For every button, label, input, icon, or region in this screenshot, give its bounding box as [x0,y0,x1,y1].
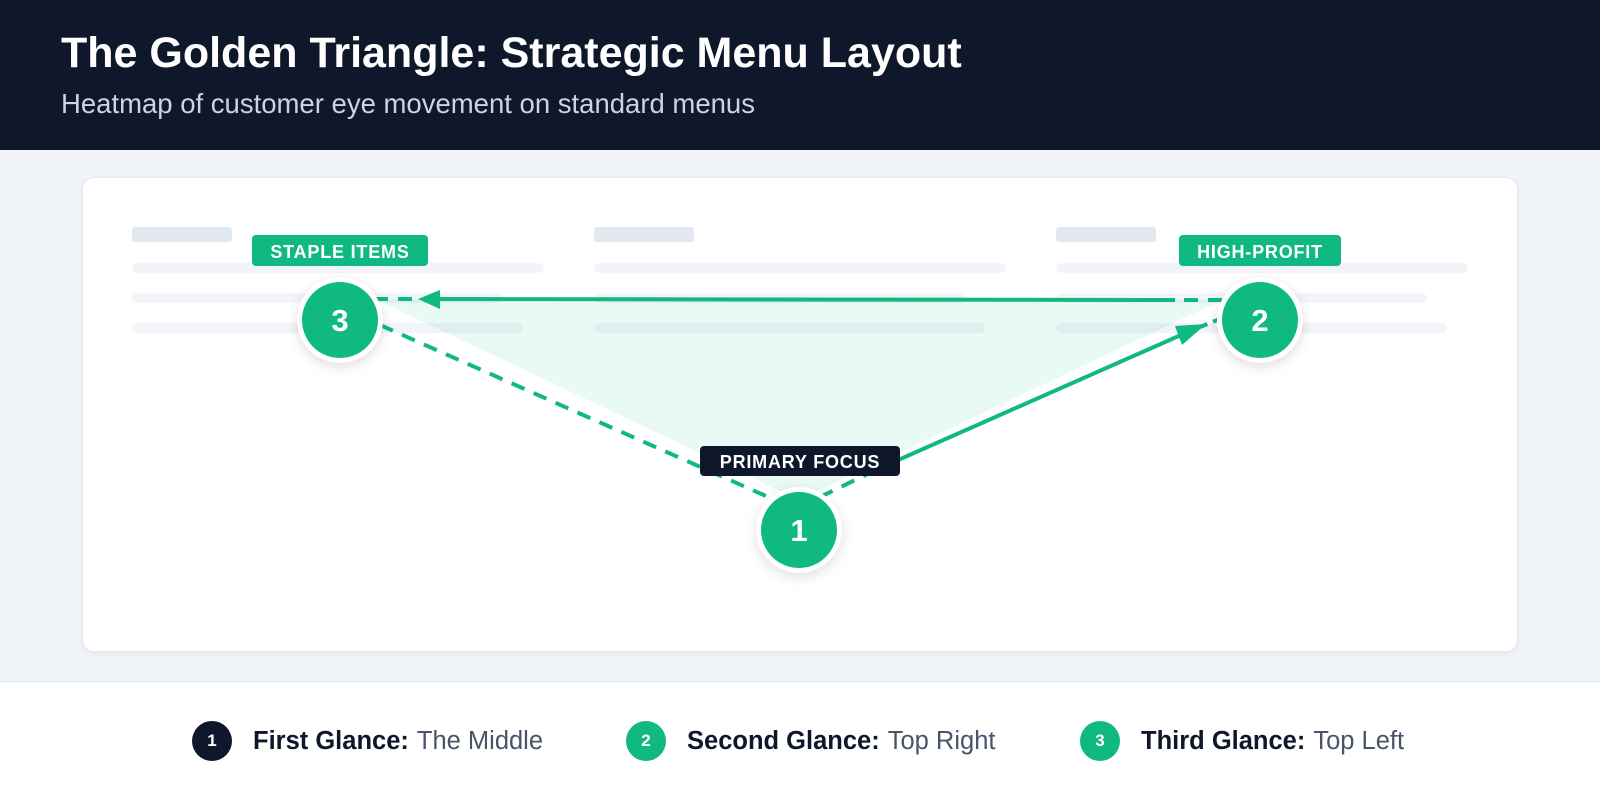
marker 1: 1 [790,513,808,548]
label: high-profit: HIGH-PROFIT [1197,242,1323,262]
legend item 2: 2 [641,731,651,750]
legend item 3 [1080,721,1404,761]
legend item 1 [192,721,543,761]
marker 2 [1217,277,1303,363]
legend item 3: Top Left [1313,726,1404,754]
legend item 3: Third Glance: [1141,726,1305,754]
marker 3 [297,277,383,363]
legend item 1: The Middle [417,726,543,754]
label: high-profit [1179,235,1341,266]
marker 2: 2 [1251,303,1269,338]
legend item 2: Top Right [888,726,995,754]
legend item 1: 1 [207,731,217,750]
label: staple items: STAPLE ITEMS [270,242,410,262]
label: primary focus: PRIMARY FOCUS [720,452,880,472]
marker 3: 3 [331,303,349,338]
arrow: 1 to 2 [820,318,1222,497]
label: staple items [252,235,428,266]
legend item 1: First Glance: [253,726,409,754]
subtitle: Heatmap of customer eye movement on standard menus [61,88,755,119]
label: primary focus [700,446,900,476]
arrow: 3 to 1 dashed [380,325,775,500]
arrow: 2 to 3 [375,290,1222,309]
title: The Golden Triangle: Strategic Menu Layout [61,29,962,77]
triangle fill [375,299,1222,500]
marker 1 [756,487,842,573]
panel: menu heatmap card [82,177,1518,652]
legend item 2: Second Glance: [687,726,880,754]
legend item 3: 3 [1095,731,1105,750]
legend item 2 [626,721,996,761]
header [0,0,1600,150]
footer legend [0,681,1600,800]
